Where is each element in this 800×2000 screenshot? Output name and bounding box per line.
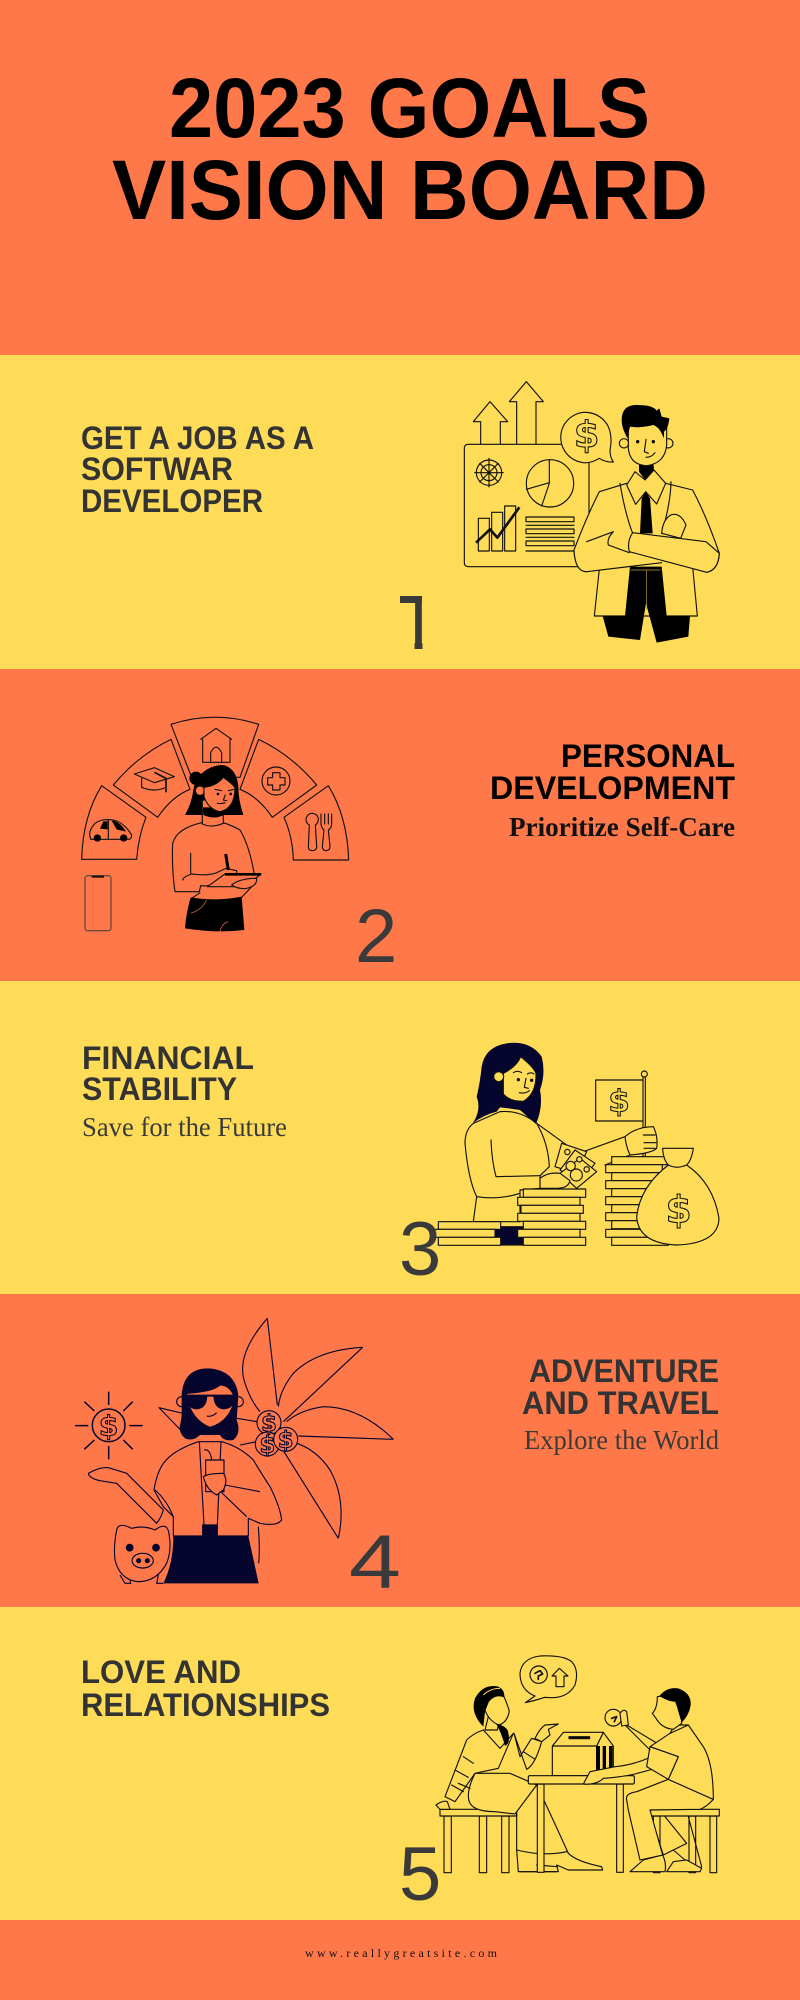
- heading: goal 4: [522, 1353, 719, 1421]
- man hair: [659, 1688, 691, 1723]
- subheading: goal 2: Prioritize Self-Care: [509, 812, 735, 842]
- heading: goal 4: ADVENTURE: [529, 1353, 719, 1389]
- woman hair: [474, 1686, 509, 1746]
- panel: goal 5 background: [0, 1607, 800, 1920]
- icon: dollar flag: $: [608, 1085, 630, 1120]
- panel: goal 1 background: [0, 355, 800, 669]
- icon: house: [201, 728, 232, 762]
- icon: dollar coins: $: [278, 1428, 294, 1454]
- heading: goal 5: RELATIONSHIPS: [81, 1687, 330, 1723]
- icon: dollar flag: [596, 1071, 657, 1157]
- icon: dollar sun: $: [99, 1410, 118, 1443]
- icon: dollar coins: $: [261, 1411, 277, 1437]
- heading: goal 3: [82, 1040, 254, 1107]
- icon: dollar speech bubble: $: [574, 413, 599, 456]
- heading: goal 2: DEVELOPMENT: [490, 770, 735, 806]
- icon: dollar sun: [75, 1392, 143, 1459]
- money box on table: [528, 1732, 634, 1872]
- illustration: businessman with charts: [464, 382, 719, 643]
- heading: goal 5: [81, 1654, 330, 1723]
- number 4: 4: [349, 1520, 401, 1605]
- woman figure: [172, 765, 261, 932]
- title: VISION BOARD: [112, 143, 708, 237]
- icon: dollar coins: $: [259, 1432, 275, 1458]
- illustration: couple saving at table: [436, 1656, 719, 1873]
- icon: piggy bank: [114, 1525, 170, 1583]
- heading: goal 1: [81, 420, 314, 519]
- icon: banknotes: [555, 1143, 597, 1188]
- icon: car: [90, 820, 132, 842]
- title: 2023 GOALS: [169, 61, 650, 155]
- icon: dollar coins: [255, 1411, 298, 1458]
- heading: goal 3: STABILITY: [82, 1071, 237, 1107]
- icon: growth arrows: [473, 382, 543, 444]
- money stacks: [433, 1157, 668, 1245]
- icon: money bag: [637, 1148, 719, 1245]
- heading: goal 1: SOFTWAR: [81, 451, 233, 487]
- icon: graduation cap: [134, 768, 174, 792]
- heading: goal 2: PERSONAL: [561, 738, 735, 774]
- woman figure: [88, 1368, 282, 1583]
- heading: goal 5: LOVE AND: [81, 1654, 241, 1690]
- woman figure: [465, 1043, 630, 1222]
- icon: hand on notes: [540, 1173, 570, 1188]
- heading: goal 3: FINANCIAL: [82, 1040, 254, 1076]
- heading: goal 1: DEVELOPER: [81, 483, 263, 519]
- chart board: [464, 444, 589, 567]
- panel: goal 4 background: [0, 1294, 800, 1607]
- panel: goal 2 background: [0, 669, 800, 981]
- number 1: [400, 596, 422, 649]
- heading: goal 2: [490, 738, 735, 806]
- number 5: 5: [399, 1832, 441, 1917]
- illustration: woman with sunglasses, palm and piggy bank: [75, 1318, 393, 1583]
- panel: footer background: [0, 1920, 800, 2000]
- number 2: 2: [355, 894, 397, 979]
- subheading: goal 4: Explore the World: [524, 1425, 719, 1455]
- icon: speech bubble with coin and arrow: [520, 1656, 577, 1703]
- heading: goal 4: AND TRAVEL: [522, 1385, 719, 1421]
- illustration: woman with life icons fan: [82, 717, 349, 932]
- man figure: [574, 405, 719, 643]
- title: [112, 61, 708, 237]
- icon: money bag: $: [666, 1188, 692, 1232]
- panel: goal 3 background: [0, 981, 800, 1294]
- man figure: [583, 1696, 713, 1872]
- heading: goal 1: GET A JOB AS A: [81, 420, 314, 456]
- footer url: www.reallygreatsite.com: [305, 1946, 498, 1960]
- number 1: 1: [396, 581, 438, 666]
- fan segments: [82, 717, 349, 860]
- woman figure: [436, 1696, 603, 1872]
- panel: header background: [0, 0, 800, 355]
- icon: dollar speech bubble: [561, 412, 613, 463]
- icon: spoon and fork: [306, 813, 332, 851]
- icon: medical cross: [262, 767, 290, 795]
- subheading: goal 3: Save for the Future: [82, 1112, 287, 1142]
- number 3: 3: [399, 1207, 441, 1292]
- stools: [440, 1809, 719, 1873]
- icon: phone: [85, 876, 111, 931]
- palm leaves: [159, 1318, 393, 1563]
- illustration: woman with money stacks: [433, 1043, 719, 1245]
